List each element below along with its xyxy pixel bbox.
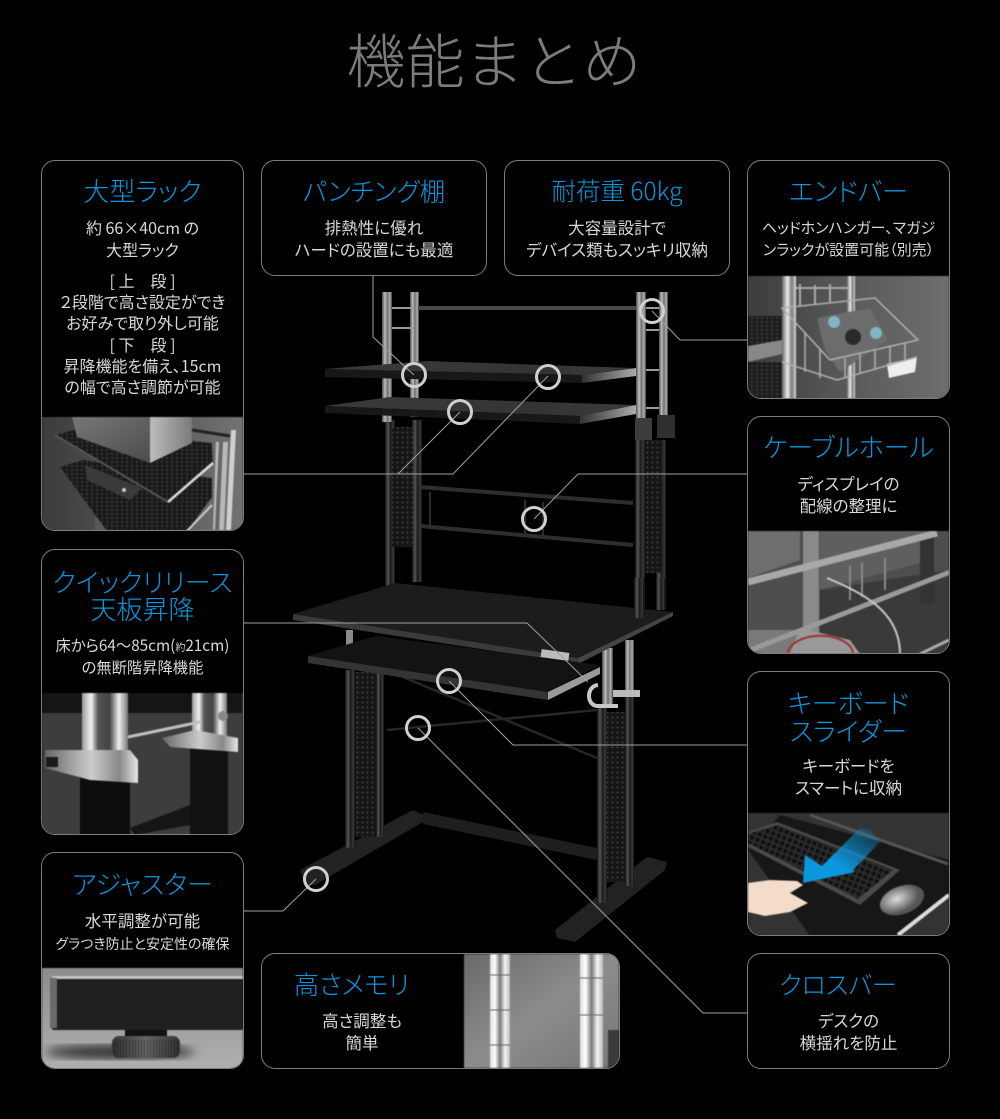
photo: rack shelves: [42, 416, 243, 530]
description: upper and lower tiers: [ 上 段 ]: [110, 268, 175, 292]
callout rings: [304, 300, 664, 890]
heading: 天板昇降: [90, 590, 194, 627]
panel: cable hole: [747, 416, 950, 654]
description: [797, 471, 900, 516]
panel: keyboard slider: [747, 671, 950, 936]
description: 約 66×40cm の: [86, 215, 199, 239]
description: ハードの設置にも最適: [295, 236, 453, 260]
description: 簡単: [346, 1030, 378, 1054]
photo: height scale on post: [463, 954, 619, 1068]
description: 大容量設計で: [568, 215, 666, 239]
description: キーボードを: [802, 753, 895, 777]
photo: controller in basket: [748, 275, 949, 398]
desk: [293, 292, 675, 942]
desk top: [293, 578, 673, 664]
description: 高さ調整も: [322, 1008, 402, 1032]
photo: sliding keyboard tray: [748, 812, 949, 935]
panel: punching shelf: [261, 160, 487, 276]
description: upper and lower tiers: [ 下 段 ]: [110, 332, 175, 356]
description: upper and lower tiers: [60, 268, 225, 398]
heading: ケーブルホール: [763, 428, 934, 465]
description: upper and lower tiers: お好みで取り外し可能: [66, 310, 219, 334]
photo: cable routed through bars: [748, 530, 949, 653]
description: [800, 1008, 897, 1054]
description: [55, 908, 230, 954]
heading: エンドバー: [789, 172, 908, 209]
heading: 大型ラック: [83, 172, 202, 209]
description: デスクの: [818, 1008, 879, 1032]
description: ディスプレイの: [797, 471, 900, 495]
panel: end bar: [747, 160, 950, 399]
description: 排熱性に優れ: [325, 215, 423, 239]
description: ヘッドホンハンガー、マガジ: [762, 217, 935, 238]
panel: adjuster: [41, 852, 244, 1069]
title: 機能まとめ: [346, 15, 642, 100]
legs: [300, 670, 667, 942]
description: [86, 215, 199, 260]
heading: スライダー: [790, 712, 907, 748]
heading: キーボード: [788, 684, 909, 721]
panel: large rack: [41, 160, 244, 531]
heading: 耐荷重 60kg: [552, 173, 682, 208]
rear bars: [420, 487, 633, 545]
description: [526, 215, 708, 260]
heading: 高さメモリ: [294, 965, 409, 1002]
hutch posts: [382, 292, 675, 620]
description: [56, 634, 229, 678]
description: 配線の整理に: [800, 492, 897, 516]
description: デバイス類もスッキリ収納: [526, 236, 708, 260]
description: グラつき防止と安定性の確保: [55, 934, 230, 954]
description: の無断階昇降機能: [82, 656, 203, 678]
description: スマートに収納: [795, 774, 902, 798]
description: 水平調整が可能: [85, 908, 200, 932]
panel: cross bar: [747, 953, 950, 1069]
description: [795, 753, 902, 798]
description: ンラックが設置可能（別売）: [763, 238, 934, 260]
heading: クイックリリース: [52, 563, 233, 600]
description: 横揺れを防止: [800, 1030, 897, 1054]
heading: [52, 563, 233, 627]
description: 大型ラック: [106, 236, 179, 260]
leader lines: [244, 276, 747, 1013]
panel: quick release: [41, 549, 244, 835]
shelf lower: [325, 397, 636, 424]
heading: パンチング棚: [303, 172, 445, 209]
description: [322, 1008, 402, 1054]
heading: アジャスター: [72, 865, 213, 902]
description: upper and lower tiers: ２段階で高さ設定ができ: [60, 289, 225, 313]
shelf upper: [325, 361, 636, 383]
description: upper and lower tiers: の幅で高さ調節が可能: [64, 374, 221, 398]
panel: height scale: [261, 953, 620, 1069]
keyboard tray: [308, 636, 600, 700]
description: upper and lower tiers: 昇降機能を備え、15cm: [64, 353, 221, 377]
description: 床から64〜85cm(約21cm): [56, 634, 229, 656]
description: [762, 217, 935, 260]
clamp hardware: [589, 640, 640, 708]
description: [295, 215, 453, 260]
photo: adjuster foot: [42, 967, 243, 1068]
heading: クロスバー: [779, 966, 897, 1002]
heading: [788, 684, 909, 748]
photo: clamp detail: [42, 692, 243, 834]
panel: load capacity: [504, 160, 730, 276]
